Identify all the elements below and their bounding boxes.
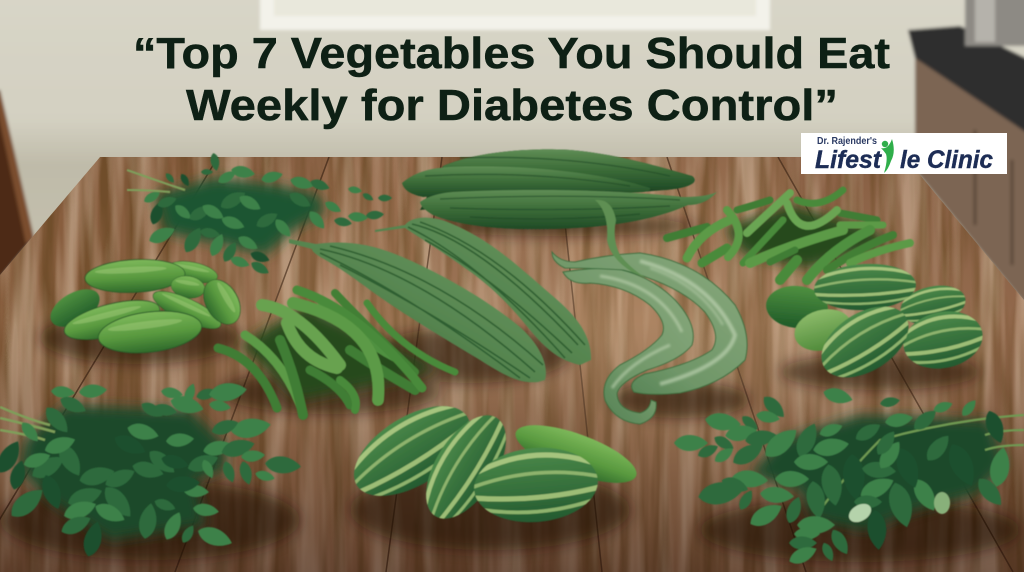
bottom-right moringa leaf bunch — [674, 385, 1024, 568]
window — [260, 0, 770, 30]
wooden chair at left — [0, 90, 34, 285]
wooden table — [0, 157, 1024, 572]
curved snake gourds — [552, 200, 747, 424]
logo: Dr. Rajender's Lifestyle Clinic — [801, 133, 1007, 174]
top-left moringa leaf bunch — [127, 152, 392, 277]
left group of small cucumbers — [44, 257, 248, 358]
bottom-left moringa leaf bunch — [0, 381, 302, 559]
three ridge gourds at top centre — [402, 149, 717, 229]
logo words le Clinic: le Clinic — [900, 146, 993, 174]
title line 1: “Top 7 Vegetables You Should Eat — [133, 29, 890, 78]
right group of striped gourds — [764, 261, 990, 393]
large ridge gourds in centre — [289, 218, 591, 382]
logo word Lifest: Lifest — [815, 146, 883, 174]
kitchen cabinet at right — [908, 0, 1024, 310]
logo icon: green figure — [881, 139, 894, 173]
drop shadows under vegetables — [0, 216, 1020, 562]
title line 2: Weekly for Diabetes Control” — [186, 81, 838, 130]
title — [133, 29, 890, 130]
centre green bean pile — [218, 290, 455, 415]
logo small text: Dr. Rajender's — [817, 136, 877, 147]
top-right green bean pile — [667, 190, 910, 280]
bottom-centre striped gourds — [337, 386, 643, 534]
background: kitchen wall — [0, 0, 1024, 315]
